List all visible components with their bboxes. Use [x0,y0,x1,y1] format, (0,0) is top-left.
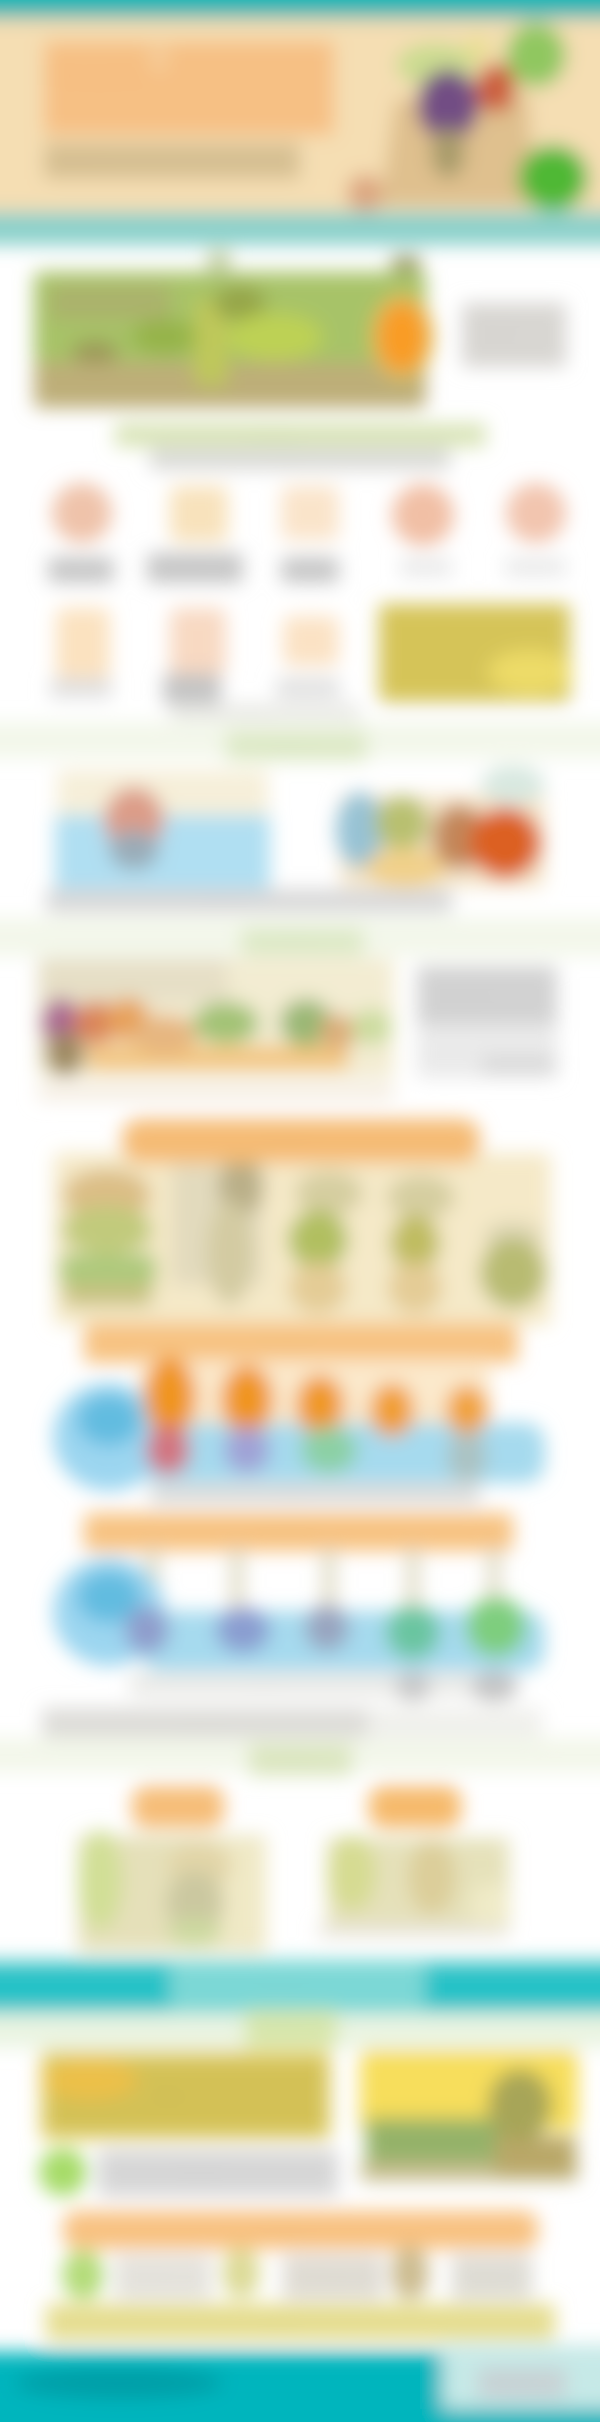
section heading 2 [0,722,600,761]
chart: drops and blue band 1 [53,1357,545,1491]
section heading 3: Section [270,934,317,950]
label 3: Label [295,566,317,576]
panel: right option [318,1835,510,1937]
text block: badge note: Note text [180,2168,220,2179]
section heading 4 [0,1738,600,1776]
section heading 5 [245,2010,337,2048]
label 6: Label [60,683,82,693]
section heading 1: Section [250,427,297,443]
panel: food scene [336,765,545,888]
bubble 1 [125,1606,169,1654]
icon 4 [392,484,454,546]
header panel [0,0,600,245]
text block: produce description [417,966,557,1078]
pill heading: fruit chart: Heading [260,1335,312,1351]
icon 1 [52,483,112,543]
label 7: Label [175,684,197,694]
pill heading: second chart [84,1513,513,1551]
label 1 [48,557,114,583]
bubble 4 [386,1605,440,1659]
caption: photo row: Caption text [200,897,249,907]
bubble 2 [216,1607,270,1653]
labels row 1: Labels [280,1490,307,1500]
callout: yellow box: Callout [430,646,464,658]
pill heading: fruit chart [84,1323,518,1363]
section heading 2: Section [265,737,312,753]
callout: yellow text box [40,2050,331,2140]
pill heading: vegetables: Heading [260,1133,312,1149]
callout: yellow text box: Callout [150,2091,184,2103]
pill: right option: Option [395,1801,430,1815]
caption: charts: Caption text [180,1720,229,1730]
bubble 5 [466,1597,526,1657]
icon 3 [281,486,339,540]
label 6 [50,678,112,698]
strip: yellow note [46,2304,555,2340]
labels row 2: Labels [250,1680,277,1690]
icon 5 [506,483,566,543]
text block: badge note [98,2150,338,2196]
vegetable 5 [480,1221,546,1308]
drop 3 [296,1375,344,1435]
labels row 2 [130,1670,518,1702]
panel: farm scene [34,250,434,408]
icon: tip 1 [62,2250,104,2300]
section heading 4: Section [270,1752,317,1768]
text: tip 3: Tip text [470,2272,500,2282]
pill: left option: Option [158,1801,193,1815]
vegetable 3 [288,1171,363,1314]
banner: second part: Banner [260,1979,305,1995]
vegetable 1 [60,1169,156,1306]
footer logo box [442,2345,600,2409]
pill heading: tips [63,2211,538,2249]
drop 4 [370,1383,414,1437]
text: section intro: Intro text [270,455,306,465]
label 5 [505,558,566,576]
text: tip 1: Tip text [135,2272,165,2282]
section heading 1 [115,423,486,447]
label 8 [276,678,340,698]
text: tip 1 [115,2255,211,2299]
chart: blue band 2 [53,1548,545,1671]
drop 5 [446,1385,488,1435]
label 4: Label [410,563,432,573]
labels row 1 [150,1484,480,1504]
pill heading: second chart: Heading [260,1524,312,1540]
label 7 [163,673,221,705]
text: tip 2 [283,2255,383,2299]
text: tip 2: Tip text [305,2272,335,2282]
title: Headline [48,59,173,92]
drop 2 [221,1365,273,1435]
icon: green badge [39,2148,87,2196]
title [44,41,334,135]
text: grid footnote [170,704,360,720]
footer [0,2345,600,2422]
label 2 [147,553,243,583]
panel: produce row [38,958,394,1078]
label 1: Label [55,566,77,576]
text block: farm description: Description [465,327,515,338]
label 5: Label [520,563,542,573]
caption: charts [42,1708,542,1740]
strip: yellow note: Note [270,2318,292,2329]
section heading 3 [0,918,600,956]
icon: tip 2 [222,2248,260,2298]
caption: photo row [46,889,452,913]
bubble 3 [305,1605,349,1651]
label 2: Label [175,564,197,574]
text: grid footnote: Footnote [235,709,267,718]
pill: right option [369,1786,461,1828]
icon 6 [56,608,110,678]
icon 7 [170,608,226,674]
callout: yellow box [379,604,572,702]
pill heading: tips: Heading [260,2223,308,2238]
subtitle [44,143,300,179]
subtitle: Subtitle text [48,156,105,168]
banner: second part [0,1960,600,2048]
text: section intro [150,448,450,470]
text block: produce description: Description [440,992,490,1003]
panel: left option [78,1830,266,1951]
drop 1 [144,1357,196,1437]
text block: farm description [462,303,566,367]
icon grid [48,483,572,705]
strip below produce [38,1084,394,1100]
icon 2 [170,486,228,542]
pill: left option [132,1786,224,1828]
panel: vegetable columns [54,1153,551,1325]
panel: water scene [55,770,270,891]
text: tip 3 [452,2255,532,2299]
icon: tip 3 [391,2246,429,2300]
section heading 5: Section [262,2022,305,2037]
vegetable 2 [172,1157,264,1305]
icon 8 [283,616,339,666]
illustration: grocery bag with produce [347,23,588,212]
pill heading: vegetables [122,1119,480,1163]
footer logo box: Source [500,2380,529,2390]
vegetable 4 [387,1175,455,1314]
illustration: landscape [360,2050,578,2181]
label 3 [281,557,339,583]
label 8: Label [290,683,312,693]
label 4 [400,558,452,576]
